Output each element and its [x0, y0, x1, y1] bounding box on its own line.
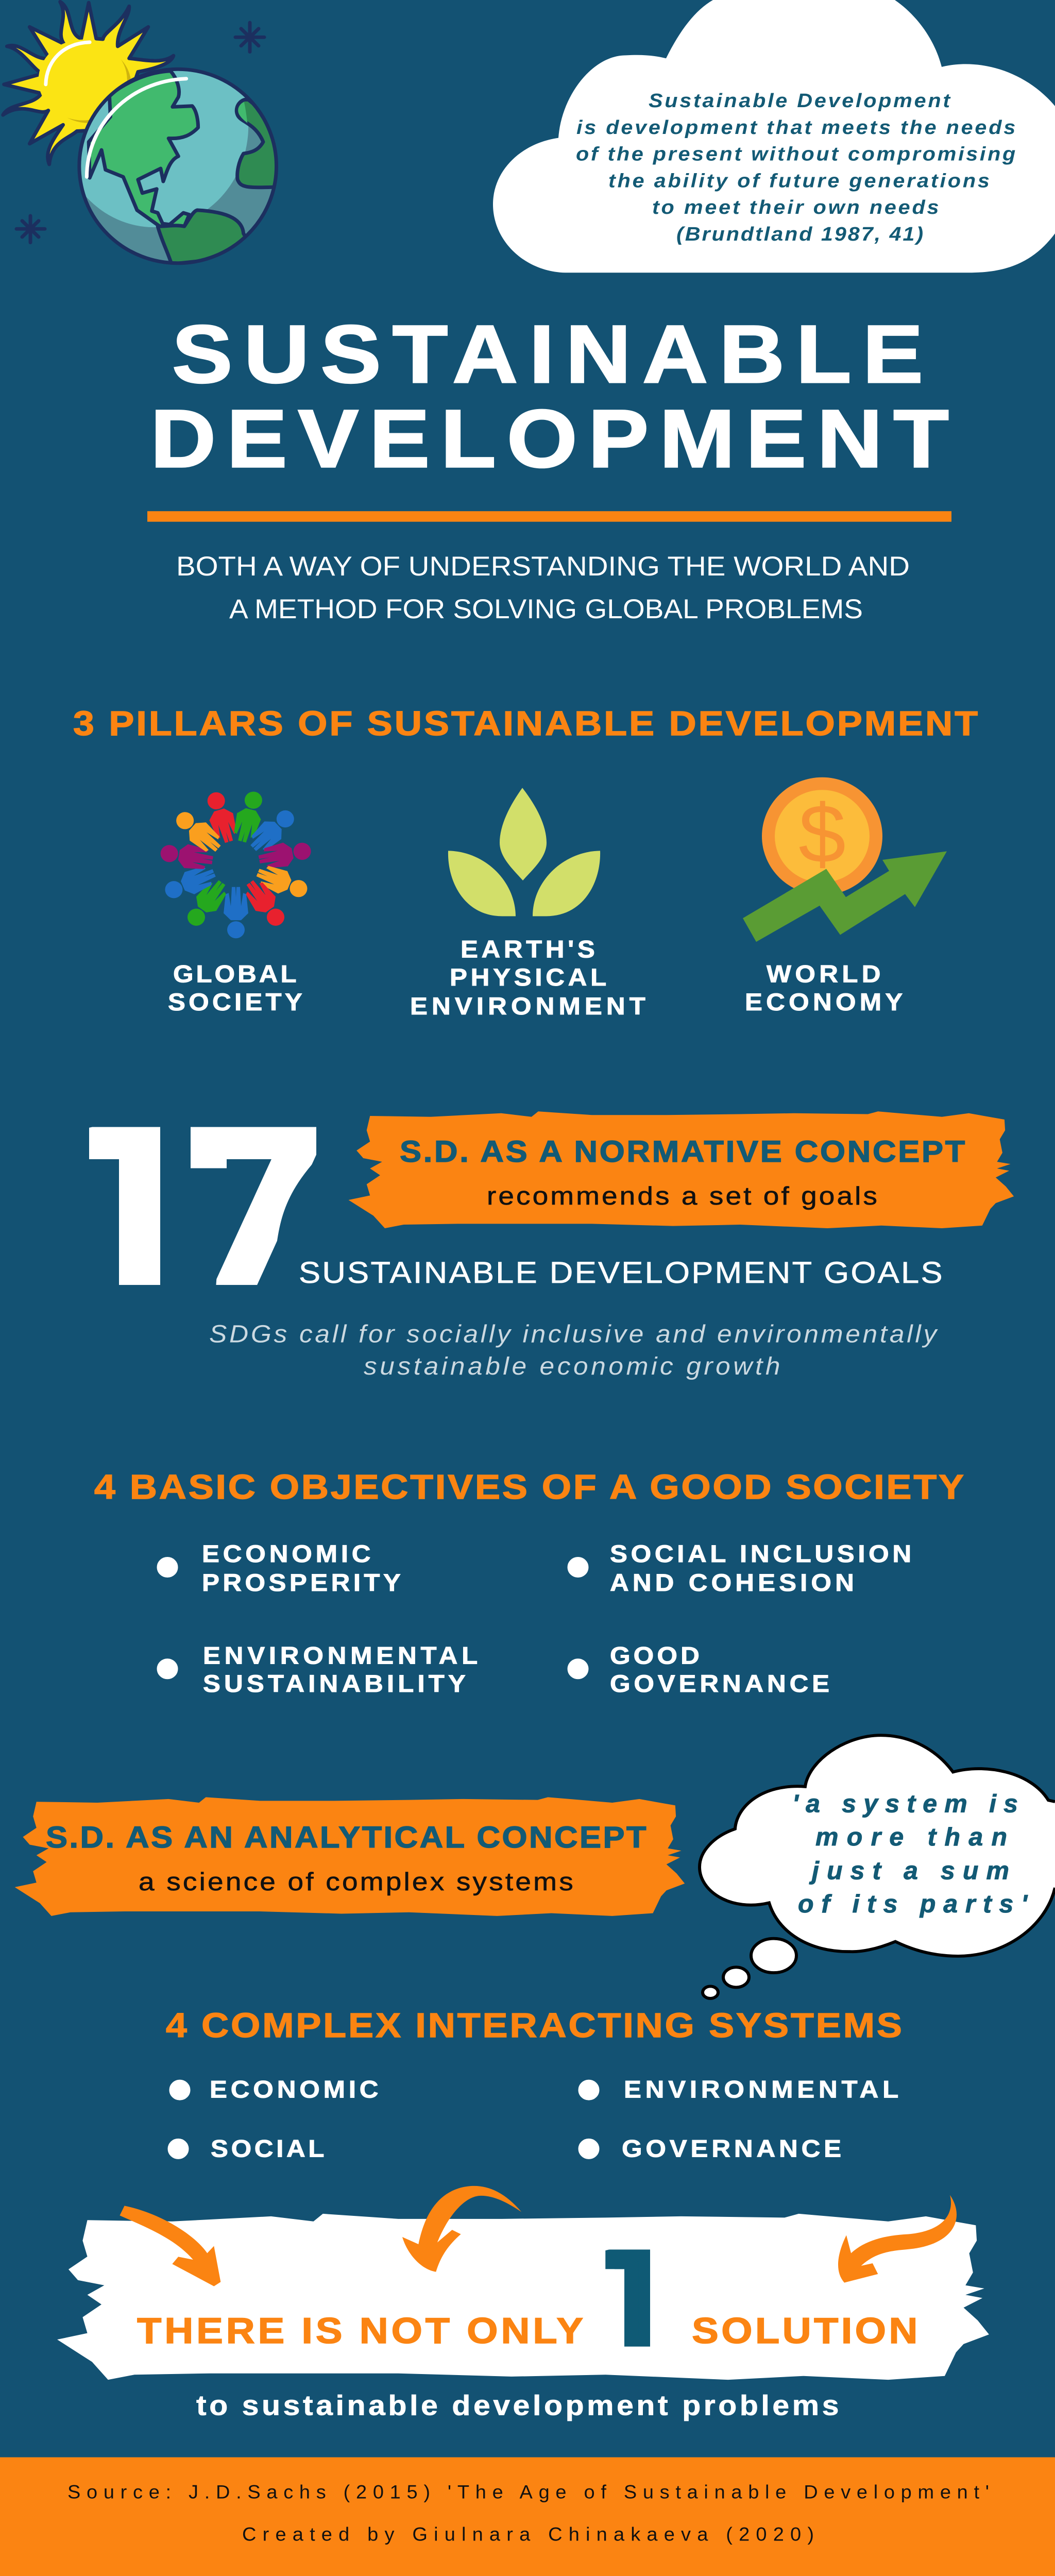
objective: good governance: GOOD — [610, 1642, 700, 1669]
definition text: to meet their own needs — [652, 197, 939, 218]
big number 17 — [89, 1127, 316, 1285]
icon: circle of people — [159, 789, 313, 938]
systems list — [168, 2076, 898, 2162]
label: earth's physical environment: ENVIRONMENT — [410, 993, 645, 1020]
orange brush stroke — [349, 1111, 1014, 1228]
label: global society: GLOBAL — [173, 961, 297, 988]
label: world economy: ECONOMY — [745, 989, 903, 1015]
arrow: middle — [402, 2186, 521, 2272]
objective: good governance — [568, 1642, 829, 1698]
icon: earth — [77, 67, 278, 265]
banner: analytical concept — [15, 1797, 685, 1916]
sdg description: sustainable economic growth — [364, 1352, 780, 1380]
subtitle: A METHOD FOR SOLVING GLOBAL PROBLEMS — [229, 595, 863, 624]
big number 1: 1 — [604, 2193, 670, 2385]
label: global society: SOCIETY — [168, 989, 302, 1015]
arrow: right — [838, 2195, 957, 2283]
definition text: Sustainable Development — [649, 90, 951, 112]
thought text: of its parts' — [798, 1890, 1028, 1918]
title: DEVELOPMENT — [150, 393, 949, 484]
pillar: earth's physical environment — [410, 788, 645, 1020]
label: world economy: WORLD — [767, 961, 881, 988]
definition text: (Brundtland 1987, 41) — [676, 223, 923, 245]
system: social: SOCIAL — [211, 2136, 324, 2162]
subtitle — [176, 552, 910, 624]
heading: 3 pillars: 3 PILLARS OF SUSTAINABLE DEVELOPMENT — [73, 704, 978, 742]
system: governance: GOVERNANCE — [622, 2136, 841, 2162]
heading: 4 complex systems: 4 COMPLEX INTERACTING SYSTEMS — [166, 2006, 902, 2044]
objective: environmental sustainability: ENVIRONMENTAL — [203, 1642, 478, 1669]
thought text: more than — [815, 1823, 1007, 1851]
big number 17: 1 — [81, 1035, 197, 1348]
closing line: to sustainable development problems — [196, 2390, 839, 2421]
label: earth's physical environment — [410, 936, 645, 1020]
white brush panel: not only one solution — [57, 2186, 989, 2385]
sdg description: SDGs call for socially inclusive and environmentally — [209, 1320, 939, 1348]
objective: good governance: GOVERNANCE — [610, 1671, 829, 1698]
orange brush stroke — [15, 1797, 685, 1916]
icon: coin with rising arrow: $ — [798, 787, 846, 880]
banner heading: S.D. AS AN ANALYTICAL CONCEPT — [46, 1820, 646, 1854]
definition text: the ability of future generations — [608, 170, 990, 192]
big number 17: 7 — [183, 1035, 323, 1348]
source credit: Source: J.D.Sachs (2015) 'The Age of Sustainable Development' — [67, 2481, 989, 2503]
banner subtext: a science of complex systems — [139, 1868, 573, 1896]
thought text: 'a system is — [792, 1790, 1018, 1818]
statement text: THERE IS NOT ONLY — [137, 2310, 583, 2351]
objective: environmental sustainability: SUSTAINABILITY — [203, 1671, 466, 1698]
objective: economic prosperity — [157, 1541, 401, 1596]
icon: coin with rising arrow — [743, 777, 947, 942]
system: environmental: ENVIRONMENTAL — [624, 2076, 898, 2103]
sdg label: SUSTAINABLE DEVELOPMENT GOALS — [299, 1256, 942, 1290]
definition text — [576, 90, 1015, 245]
objective: economic prosperity: PROSPERITY — [202, 1570, 401, 1596]
icon: sun — [3, 2, 174, 164]
objective: social inclusion — [568, 1541, 911, 1596]
title: SUSTAINABLE — [172, 308, 923, 400]
heading: 4 basic objectives: 4 BASIC OBJECTIVES OF A GOOD SOCIETY — [94, 1468, 964, 1506]
thought text — [792, 1790, 1028, 1918]
banner: normative concept — [349, 1111, 1014, 1228]
objectives list — [157, 1541, 911, 1698]
banner heading: S.D. AS A NORMATIVE CONCEPT — [400, 1134, 965, 1168]
objective: environmental sustainability — [157, 1642, 478, 1698]
thought bubble — [700, 1735, 1055, 1998]
objective: economic prosperity: ECONOMIC — [202, 1541, 371, 1568]
cloud with definition — [493, 0, 1055, 273]
thought text: just a sum — [809, 1857, 1009, 1885]
system: economic: ECONOMIC — [210, 2076, 379, 2103]
pillar: global society — [159, 789, 313, 1015]
white brush stroke — [57, 2214, 989, 2380]
footer — [0, 2458, 1055, 2576]
label: earth's physical environment: EARTH'S — [461, 936, 595, 963]
icon: three leaves — [448, 788, 600, 916]
icon: star — [16, 23, 264, 243]
illustration: sun and earth — [3, 2, 280, 264]
creator credit: Created by Giulnara Chinakaeva (2020) — [242, 2523, 814, 2545]
definition text: is development that meets the needs — [576, 116, 1015, 138]
label: global society — [168, 961, 302, 1015]
arrow: left — [120, 2206, 220, 2286]
title — [150, 308, 949, 484]
objective: social inclusion: SOCIAL INCLUSION — [610, 1541, 911, 1568]
statement text end: SOLUTION — [692, 2310, 917, 2351]
thought dots — [703, 1939, 796, 1998]
label: earth's physical environment: PHYSICAL — [450, 964, 606, 991]
sdg description — [209, 1320, 939, 1380]
banner subtext: recommends a set of goals — [487, 1182, 877, 1210]
orange title rule — [147, 511, 951, 522]
label: world economy — [745, 961, 903, 1015]
pillar: world economy — [743, 777, 947, 1015]
objective: social inclusion: AND COHESION — [610, 1570, 854, 1596]
subtitle: BOTH A WAY OF UNDERSTANDING THE WORLD AND — [176, 552, 910, 582]
definition text: of the present without compromising — [576, 143, 1015, 165]
